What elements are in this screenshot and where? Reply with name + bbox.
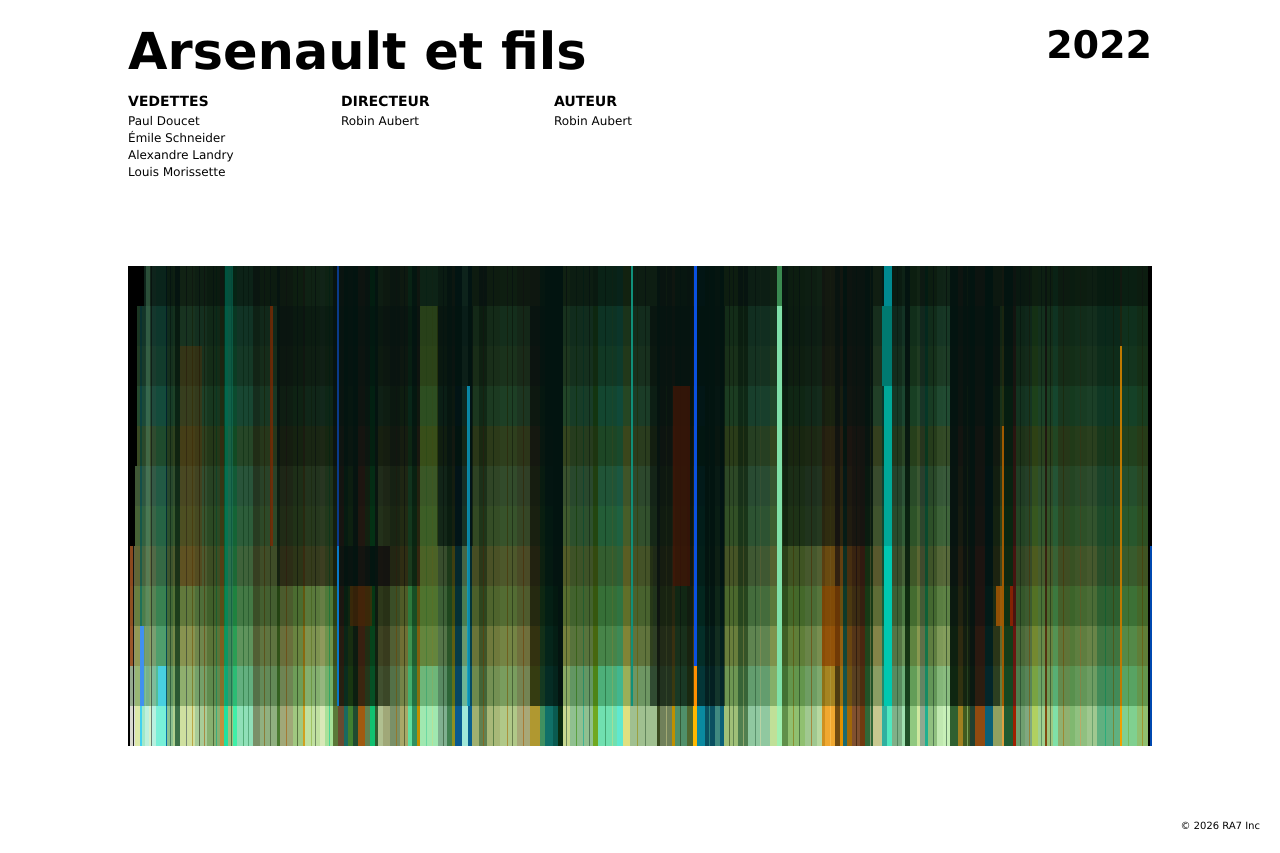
author name: Robin Aubert [554, 114, 632, 128]
cast list: Émile Schneider [128, 131, 225, 145]
heading: auteur: AUTEUR [554, 94, 617, 110]
colour barcode chart [128, 266, 1152, 746]
year: 2022 [1046, 23, 1152, 67]
cast list: Louis Morissette [128, 165, 225, 179]
cast list: Paul Doucet [128, 114, 200, 128]
copyright: © 2026 RA7 Inc [1180, 821, 1260, 832]
dark column shading [277, 306, 1000, 706]
cast list: Alexandre Landry [128, 148, 234, 162]
director name: Robin Aubert [341, 114, 419, 128]
heading: vedettes: VEDETTES [128, 94, 209, 110]
heading: directeur: DIRECTEUR [341, 94, 430, 110]
title: Arsenault et fils [128, 23, 587, 82]
row shading [128, 266, 1152, 706]
bright accent columns [146, 266, 1122, 706]
cast list [128, 114, 234, 179]
dark tone floor [128, 266, 1152, 706]
regional patches [128, 266, 1152, 746]
